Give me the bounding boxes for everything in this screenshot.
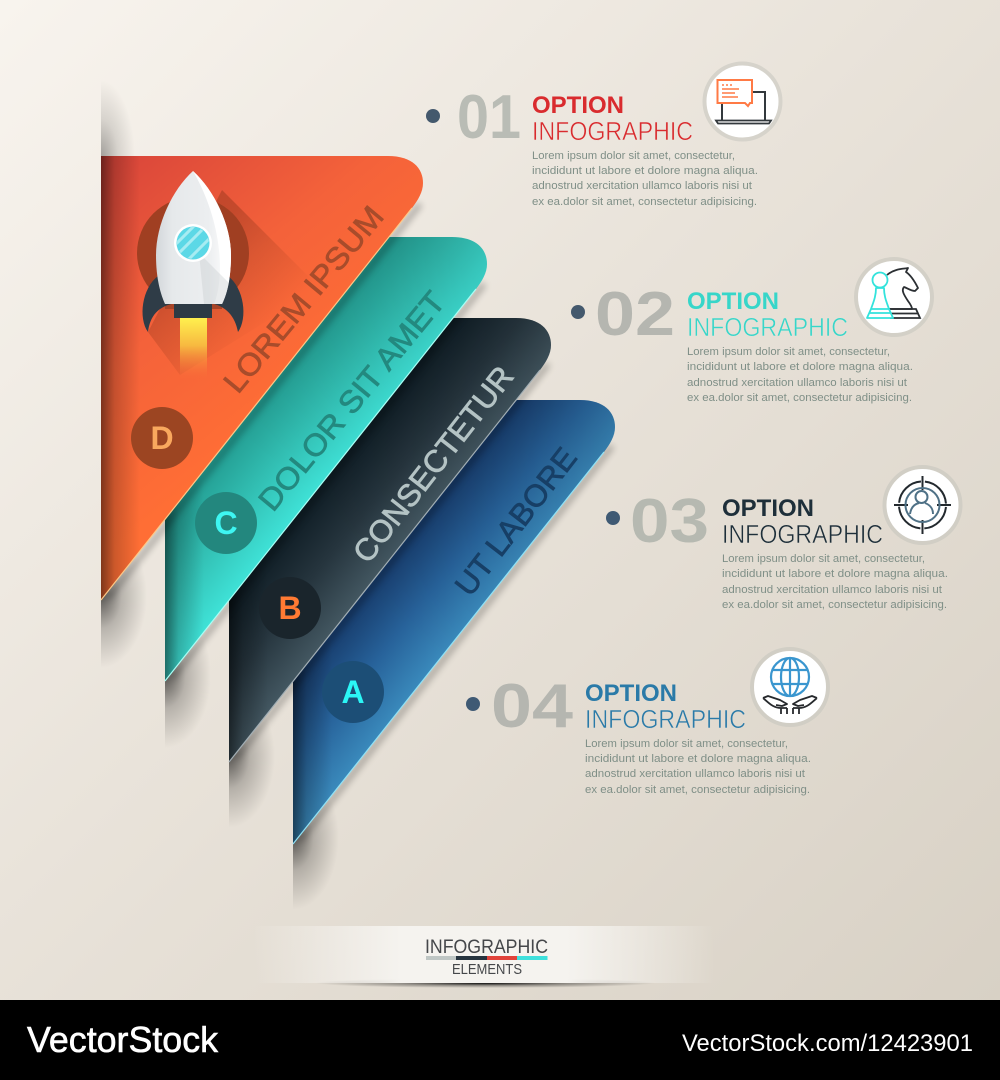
body text: [687, 346, 913, 404]
body text: adnostrud xercitation ullamco laboris nisi ut: [687, 377, 907, 389]
body text: ex ea.dolor sit amet, consectetur adipisicing.: [585, 784, 810, 796]
body text: Lorem ipsum dolor sit amet, consectetur,: [722, 553, 925, 565]
colour bar: [426, 956, 548, 960]
badge D: D: [150, 420, 174, 456]
badge A: [322, 661, 384, 723]
body text: Lorem ipsum dolor sit amet, consectetur,: [532, 150, 735, 162]
heading: OPTION: [722, 495, 814, 522]
heading: OPTION: [585, 680, 677, 707]
subheading: INFOGRAPHIC: [687, 314, 848, 342]
body text: incididunt ut labore et dolore magna aliqua.: [687, 361, 913, 373]
brand: VectorStock: [27, 1019, 219, 1060]
ribbon A: blue: [292, 400, 616, 904]
ribbon label: LOREM IPSUM: LOREM IPSUM: [216, 199, 391, 399]
ribbon label: CONSECTETUR: CONSECTETUR: [346, 359, 521, 569]
icon: laptop with speech bubble: [704, 64, 780, 140]
number 04: 04: [491, 672, 574, 741]
subheading: INFOGRAPHIC: [585, 706, 746, 734]
heading: OPTION: [687, 288, 779, 315]
ribbon B: dark: [228, 318, 552, 822]
body text: adnostrud xercitation ullamco laboris nisi ut: [722, 584, 942, 596]
panel: option 03: [606, 467, 960, 611]
number 01: 01: [457, 83, 521, 152]
badge B: [259, 577, 321, 639]
ribbon label: UT LABORE: UT LABORE: [448, 441, 584, 602]
number 02: 02: [595, 280, 675, 349]
shadow above top ribbon: [101, 92, 130, 156]
rocket long shadow: [148, 190, 298, 374]
icon: chess pieces: [856, 259, 932, 335]
ribbon label: DOLOR SIT AMET: DOLOR SIT AMET: [251, 284, 452, 517]
icon: globe in hands: [752, 649, 828, 725]
url: VectorStock.com/12423901: [682, 1030, 973, 1057]
body text: [532, 150, 758, 208]
number 03: 03: [630, 487, 709, 556]
body text: [722, 553, 948, 611]
badge B: B: [278, 590, 302, 626]
dot: [571, 305, 585, 319]
dot: [426, 109, 440, 123]
badge A: A: [341, 674, 365, 710]
body text: incididunt ut labore et dolore magna aliqua.: [532, 165, 758, 177]
panel: option 01: [426, 64, 780, 208]
heading: OPTION: [532, 92, 624, 119]
badge C: C: [214, 505, 238, 541]
body text: Lorem ipsum dolor sit amet, consectetur,: [687, 346, 890, 358]
dot: [466, 697, 480, 711]
watermark bar: [0, 1000, 1000, 1080]
body text: [585, 738, 811, 796]
subheading: INFOGRAPHIC: [722, 521, 883, 549]
subheading: INFOGRAPHIC: [532, 118, 693, 146]
body text: incididunt ut labore et dolore magna aliqua.: [585, 753, 811, 765]
icon: rocket: [137, 171, 249, 380]
body text: ex ea.dolor sit amet, consectetur adipisicing.: [687, 392, 912, 404]
panel: option 04: [466, 649, 828, 796]
ribbon C: teal: [164, 237, 488, 742]
body text: incididunt ut labore et dolore magna aliqua.: [722, 568, 948, 580]
body text: Lorem ipsum dolor sit amet, consectetur,: [585, 738, 788, 750]
badge D: [131, 407, 193, 469]
dot: [606, 511, 620, 525]
footer banner: [253, 926, 715, 988]
icon: target person: [884, 467, 960, 543]
panel: option 02: [571, 259, 932, 404]
ribbon D: orange: [100, 156, 424, 662]
badge C: [195, 492, 257, 554]
body text: ex ea.dolor sit amet, consectetur adipisicing.: [722, 599, 947, 611]
banner subtitle: ELEMENTS: [452, 961, 522, 978]
body text: ex ea.dolor sit amet, consectetur adipisicing.: [532, 196, 757, 208]
body text: adnostrud xercitation ullamco laboris nisi ut: [532, 180, 752, 192]
body text: adnostrud xercitation ullamco laboris nisi ut: [585, 768, 805, 780]
banner title: INFOGRAPHIC: [425, 937, 548, 958]
